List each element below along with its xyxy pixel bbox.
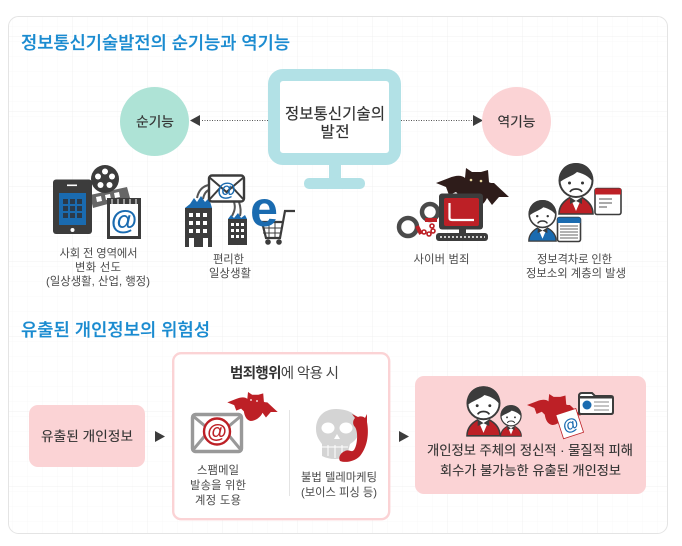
monitor: technology development <box>274 75 395 189</box>
text: information gap: 정보소외 계층의 발생 <box>526 267 626 280</box>
panel: criminal misuse <box>173 353 389 519</box>
icon: tablet, film and notepad: @ <box>111 205 137 235</box>
icon: cyber crime <box>399 168 509 241</box>
icon: information gap people <box>529 163 621 242</box>
heading: functions: 정보통신기술발전의 순기능과 역기능 <box>21 33 290 53</box>
icon: buildings, mail and shopping <box>185 176 295 247</box>
text: social change: (일상생활, 산업, 행정) <box>46 274 150 288</box>
icon: spam mail: @ <box>207 421 227 443</box>
icon: red bat with notepad and folder <box>527 393 613 439</box>
icon: spam mail <box>192 392 278 452</box>
text: spam mail: 스팸메일 <box>197 463 239 477</box>
text: spam mail: 발송을 위한 <box>190 479 246 492</box>
text: information gap <box>526 252 626 280</box>
circle: positive function: 순기능 <box>136 114 174 130</box>
panel: consequence <box>415 376 646 494</box>
monitor: technology development: 정보통신기술의 <box>285 105 385 123</box>
text: spam mail <box>190 463 246 507</box>
arrow <box>155 431 165 442</box>
box: leaked personal information: 유출된 개인정보 <box>41 429 133 444</box>
circle: negative function <box>482 87 551 156</box>
box: leaked personal information <box>29 405 145 467</box>
heading: criminal misuse: 범죄행위에 악용 시 <box>230 365 339 382</box>
text: illegal telemarketing: (보이스 피싱 등) <box>301 486 377 499</box>
arrow: to negative function <box>401 115 483 126</box>
icon: buildings, mail and shopping: @ <box>217 180 236 201</box>
text: illegal telemarketing: 불법 텔레마케팅 <box>301 471 377 484</box>
text: spam mail: 계정 도용 <box>195 494 241 507</box>
text: daily life: 편리한 <box>213 253 244 266</box>
text: social change: 변화 선도 <box>75 261 121 274</box>
icon: victims <box>467 386 521 436</box>
text: social change <box>46 247 150 288</box>
text: social change: 사회 전 영역에서 <box>60 247 138 260</box>
text: consequence: 회수가 불가능한 유출된 개인정보 <box>440 463 621 478</box>
text: information gap: 정보격차로 인한 <box>537 252 612 266</box>
text: daily life <box>209 253 251 280</box>
circle: negative function: 역기능 <box>498 114 536 130</box>
icon: buildings, mail and shopping: e <box>250 181 278 237</box>
heading: risk of leaked data: 유출된 개인정보의 위험성 <box>21 320 210 340</box>
icon: tablet, film and notepad <box>53 165 141 239</box>
text: consequence <box>427 443 633 478</box>
arrow: to positive function <box>190 115 268 126</box>
text: cyber crime: 사이버 범죄 <box>414 253 470 266</box>
circle: positive function <box>120 87 189 156</box>
arrow <box>399 431 409 442</box>
text: consequence: 개인정보 주체의 정신적 · 물질적 피해 <box>427 443 633 458</box>
icon: skull and phone <box>316 409 368 462</box>
text: daily life: 일상생활 <box>209 266 251 280</box>
text: illegal telemarketing <box>301 471 377 499</box>
monitor: technology development: 발전 <box>320 123 350 141</box>
icon: red bat with notepad and folder: @ <box>561 415 581 436</box>
